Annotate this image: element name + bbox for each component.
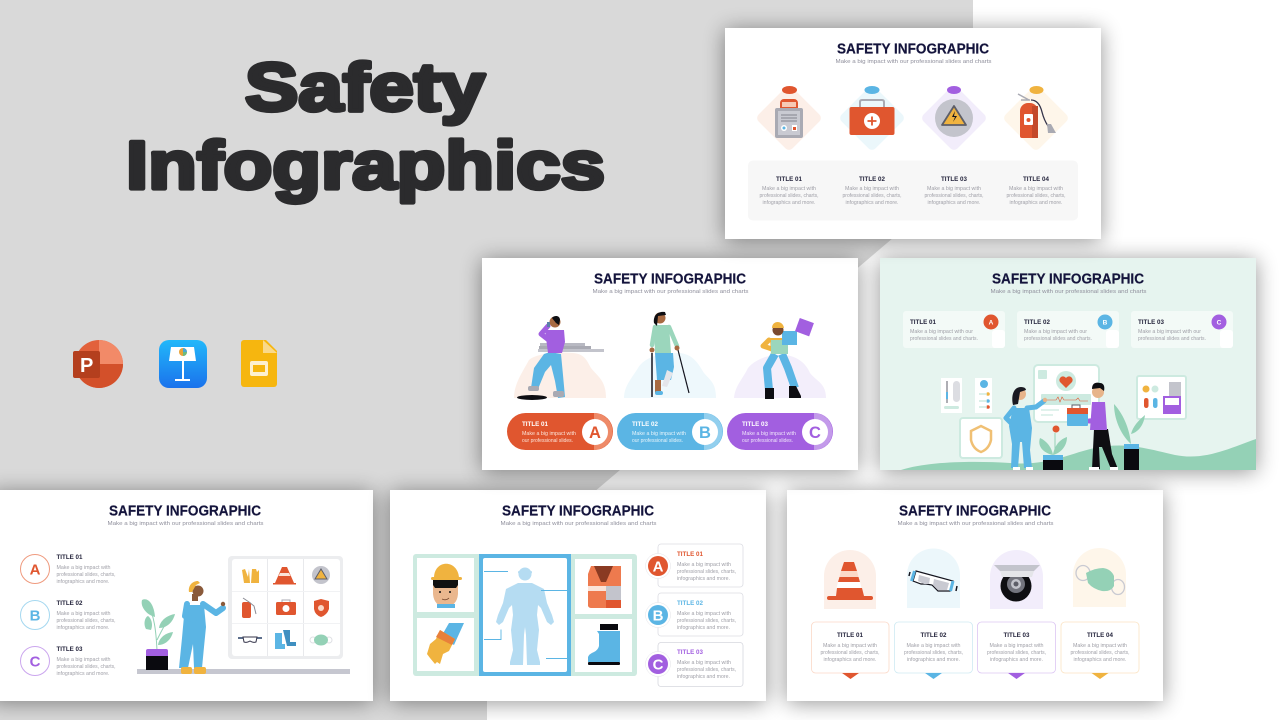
icon: PowerPoint: P	[80, 355, 93, 377]
card 04	[1061, 622, 1139, 679]
card C	[1131, 311, 1233, 348]
slide: left with icon board	[0, 490, 373, 703]
card B: TITLE 02	[677, 600, 703, 607]
icon: control box	[755, 84, 823, 152]
card B: infographics and more.	[677, 625, 730, 631]
figure: worker carrying boxes	[734, 318, 826, 399]
card B: professional slides, charts,	[677, 618, 736, 624]
card C: TITLE 03	[677, 649, 703, 656]
arch: security camera	[990, 550, 1043, 609]
item C: professional slides, charts,	[56, 664, 116, 670]
slide: worker body with PPE: Make a big impact with our professional slides and charts	[500, 521, 657, 527]
column 03: Make a big impact with	[927, 186, 981, 192]
illustration: medicine card	[1137, 376, 1186, 419]
hills	[901, 439, 1256, 470]
card A: professional slides, charts,	[677, 569, 736, 575]
card A: Make a big impact with our	[910, 329, 973, 335]
arch: traffic cone	[824, 550, 876, 609]
card A	[646, 544, 743, 587]
card 02: TITLE 02	[920, 632, 947, 639]
pill A	[507, 413, 613, 450]
card A: A	[653, 558, 664, 576]
worker silhouette	[496, 568, 554, 665]
card A: TITLE 01	[677, 551, 703, 558]
slide: mint health scene: Make a big impact with our professional slides and charts	[990, 289, 1147, 295]
card B: B	[1103, 320, 1108, 326]
pill A: A	[589, 424, 601, 442]
pill C	[727, 413, 833, 450]
figure: man on phone	[514, 316, 606, 400]
item A: TITLE 01	[56, 554, 83, 561]
item B: Make a big impact with	[56, 611, 111, 617]
icon board	[228, 556, 343, 659]
card 02: Make a big impact with	[906, 643, 961, 649]
card 04: professional slides, charts,	[1070, 650, 1130, 656]
column 03: infographics and more.	[928, 200, 980, 206]
pill B: B	[699, 424, 711, 442]
card 04: infographics and more.	[1074, 657, 1126, 663]
card 04: TITLE 04	[1087, 632, 1113, 639]
card 02: infographics and more.	[907, 657, 960, 663]
slide: four arches: SAFETY INFOGRAPHIC	[899, 504, 1051, 520]
column 02: Make a big impact with	[845, 186, 899, 192]
card A: infographics and more.	[677, 576, 730, 582]
slide: mint health scene: SAFETY INFOGRAPHIC	[992, 272, 1144, 288]
card A: TITLE 01	[910, 319, 936, 326]
icon: warning sign	[920, 84, 988, 152]
hard hat worker head	[431, 564, 462, 608]
glove	[427, 623, 464, 664]
item B: infographics and more.	[56, 625, 110, 631]
figure: woman on crutches	[624, 312, 716, 398]
safety boot	[588, 624, 620, 665]
pill C: our professional slides.	[742, 438, 793, 444]
item B: B	[30, 608, 41, 624]
slide: four arches: Make a big impact with our professional slides and charts	[898, 521, 1054, 527]
column 01	[760, 176, 818, 206]
card C: infographics and more.	[677, 674, 730, 680]
plant with pot	[142, 599, 175, 670]
column 02: infographics and more.	[846, 200, 898, 206]
card 02	[894, 622, 972, 679]
slide: three people with pills: Make a big impact with our professional slides and charts	[592, 289, 749, 295]
item C: Make a big impact with	[56, 657, 111, 663]
pill C: C	[809, 424, 821, 442]
item A: professional slides, charts,	[56, 572, 116, 578]
pill B: Make a big impact with	[632, 431, 686, 437]
slide: three people with pills: SAFETY INFOGRAPHIC	[594, 272, 746, 288]
illustration: small charts and cards	[941, 378, 1002, 458]
icon: first aid kit	[838, 84, 906, 152]
card 02: professional slides, charts,	[904, 650, 963, 656]
pill B: our professional slides.	[632, 438, 683, 444]
column 01: TITLE 01	[776, 176, 802, 183]
column 02: TITLE 02	[859, 176, 885, 183]
slide: worker body with PPE	[390, 490, 766, 703]
pill A: TITLE 01	[522, 421, 548, 428]
background: gray angled shape	[0, 0, 973, 720]
card A	[903, 311, 1005, 348]
card 01: Make a big impact with	[823, 643, 877, 649]
item C: C	[30, 654, 41, 670]
icon: Keynote	[159, 340, 207, 388]
card 03: professional slides, charts,	[987, 650, 1046, 656]
column 04	[1006, 176, 1066, 206]
column 01: Make a big impact with	[762, 186, 816, 192]
card B: Make a big impact with our	[1024, 329, 1087, 335]
item B	[20, 600, 116, 631]
card C: professional slides and charts.	[1138, 336, 1206, 342]
column 04: professional slides, charts,	[1006, 193, 1066, 199]
pill A: our professional slides.	[522, 438, 573, 444]
card B: TITLE 02	[1024, 319, 1050, 326]
item A	[20, 554, 116, 585]
card C: C	[653, 656, 664, 674]
item C: TITLE 03	[56, 646, 83, 653]
card 03	[978, 622, 1056, 679]
card B: B	[653, 608, 664, 624]
slide: four safety icons	[725, 28, 1101, 241]
card C: C	[1217, 320, 1222, 326]
slide: left with icon board: Make a big impact with our professional slides and charts	[108, 521, 264, 527]
card 03: infographics and more.	[990, 657, 1043, 663]
card 03: Make a big impact with	[990, 643, 1044, 649]
item C: infographics and more.	[56, 671, 110, 677]
safety vest	[588, 566, 621, 608]
slide: left with icon board: SAFETY INFOGRAPHIC	[109, 504, 261, 520]
main title	[126, 50, 605, 204]
column 04: Make a big impact with	[1009, 186, 1063, 192]
card 01: TITLE 01	[837, 632, 863, 639]
pill B	[617, 413, 723, 450]
illustration: heart monitor	[1034, 365, 1099, 422]
pill C: TITLE 03	[742, 421, 768, 428]
card C: Make a big impact with our	[1138, 329, 1201, 335]
pill C: Make a big impact with	[742, 431, 796, 437]
slide: worker body with PPE: SAFETY INFOGRAPHIC	[502, 504, 654, 520]
illustration: woman in blue	[1006, 387, 1047, 470]
item A: infographics and more.	[56, 579, 110, 585]
card B	[1017, 311, 1119, 348]
column 01: professional slides, charts,	[760, 193, 818, 199]
column 04: infographics and more.	[1010, 200, 1062, 206]
icon: PowerPoint	[73, 340, 123, 388]
column 01: infographics and more.	[762, 200, 816, 206]
column 03: professional slides, charts,	[924, 193, 984, 199]
PPE diagram	[413, 554, 637, 676]
item B: professional slides, charts,	[56, 618, 116, 624]
ground	[137, 669, 350, 674]
card B: Make a big impact with	[677, 611, 731, 617]
pill B: TITLE 02	[632, 421, 658, 428]
icon: fire extinguisher	[1002, 84, 1070, 152]
slide: mint health scene	[880, 258, 1256, 472]
card C: professional slides, charts,	[677, 667, 736, 673]
slide: four safety icons: SAFETY INFOGRAPHIC	[837, 42, 989, 58]
text panel	[748, 160, 1078, 220]
main title: Safety	[245, 50, 485, 126]
column 04: TITLE 04	[1023, 176, 1049, 183]
illustration: plants and pots	[1039, 404, 1145, 470]
pointer lines	[484, 572, 567, 658]
card A: Make a big impact with	[677, 562, 731, 568]
slide: four safety icons: Make a big impact with our professional slides and charts	[836, 59, 992, 65]
card 03: TITLE 03	[1004, 632, 1030, 639]
card C: TITLE 03	[1138, 319, 1164, 326]
illustration: man with kit	[1067, 383, 1118, 470]
card C	[646, 642, 743, 686]
item C	[20, 646, 116, 677]
column 03	[924, 176, 984, 206]
item A: Make a big impact with	[56, 565, 111, 571]
slide: four arches	[787, 490, 1163, 703]
item B: TITLE 02	[56, 600, 83, 607]
card C: Make a big impact with	[677, 660, 731, 666]
item A: A	[30, 562, 41, 578]
card B	[646, 593, 743, 636]
column 02: professional slides, charts,	[842, 193, 902, 199]
column 03: TITLE 03	[941, 176, 967, 183]
arch: face mask	[1073, 548, 1126, 607]
card 01: infographics and more.	[824, 657, 876, 663]
icon: Google Slides	[241, 340, 277, 387]
card 01: professional slides, charts,	[820, 650, 880, 656]
slide: three people with pills	[482, 258, 858, 472]
card 04: Make a big impact with	[1073, 643, 1127, 649]
card B: professional slides and charts.	[1024, 336, 1092, 342]
column 02	[842, 176, 902, 206]
worker pointing	[179, 581, 225, 674]
card A: A	[989, 320, 994, 326]
main title: Infographics	[126, 128, 605, 204]
card 01	[812, 622, 889, 679]
arch: goggles	[907, 548, 960, 608]
card A: professional slides and charts.	[910, 336, 978, 342]
pill A: Make a big impact with	[522, 431, 576, 437]
